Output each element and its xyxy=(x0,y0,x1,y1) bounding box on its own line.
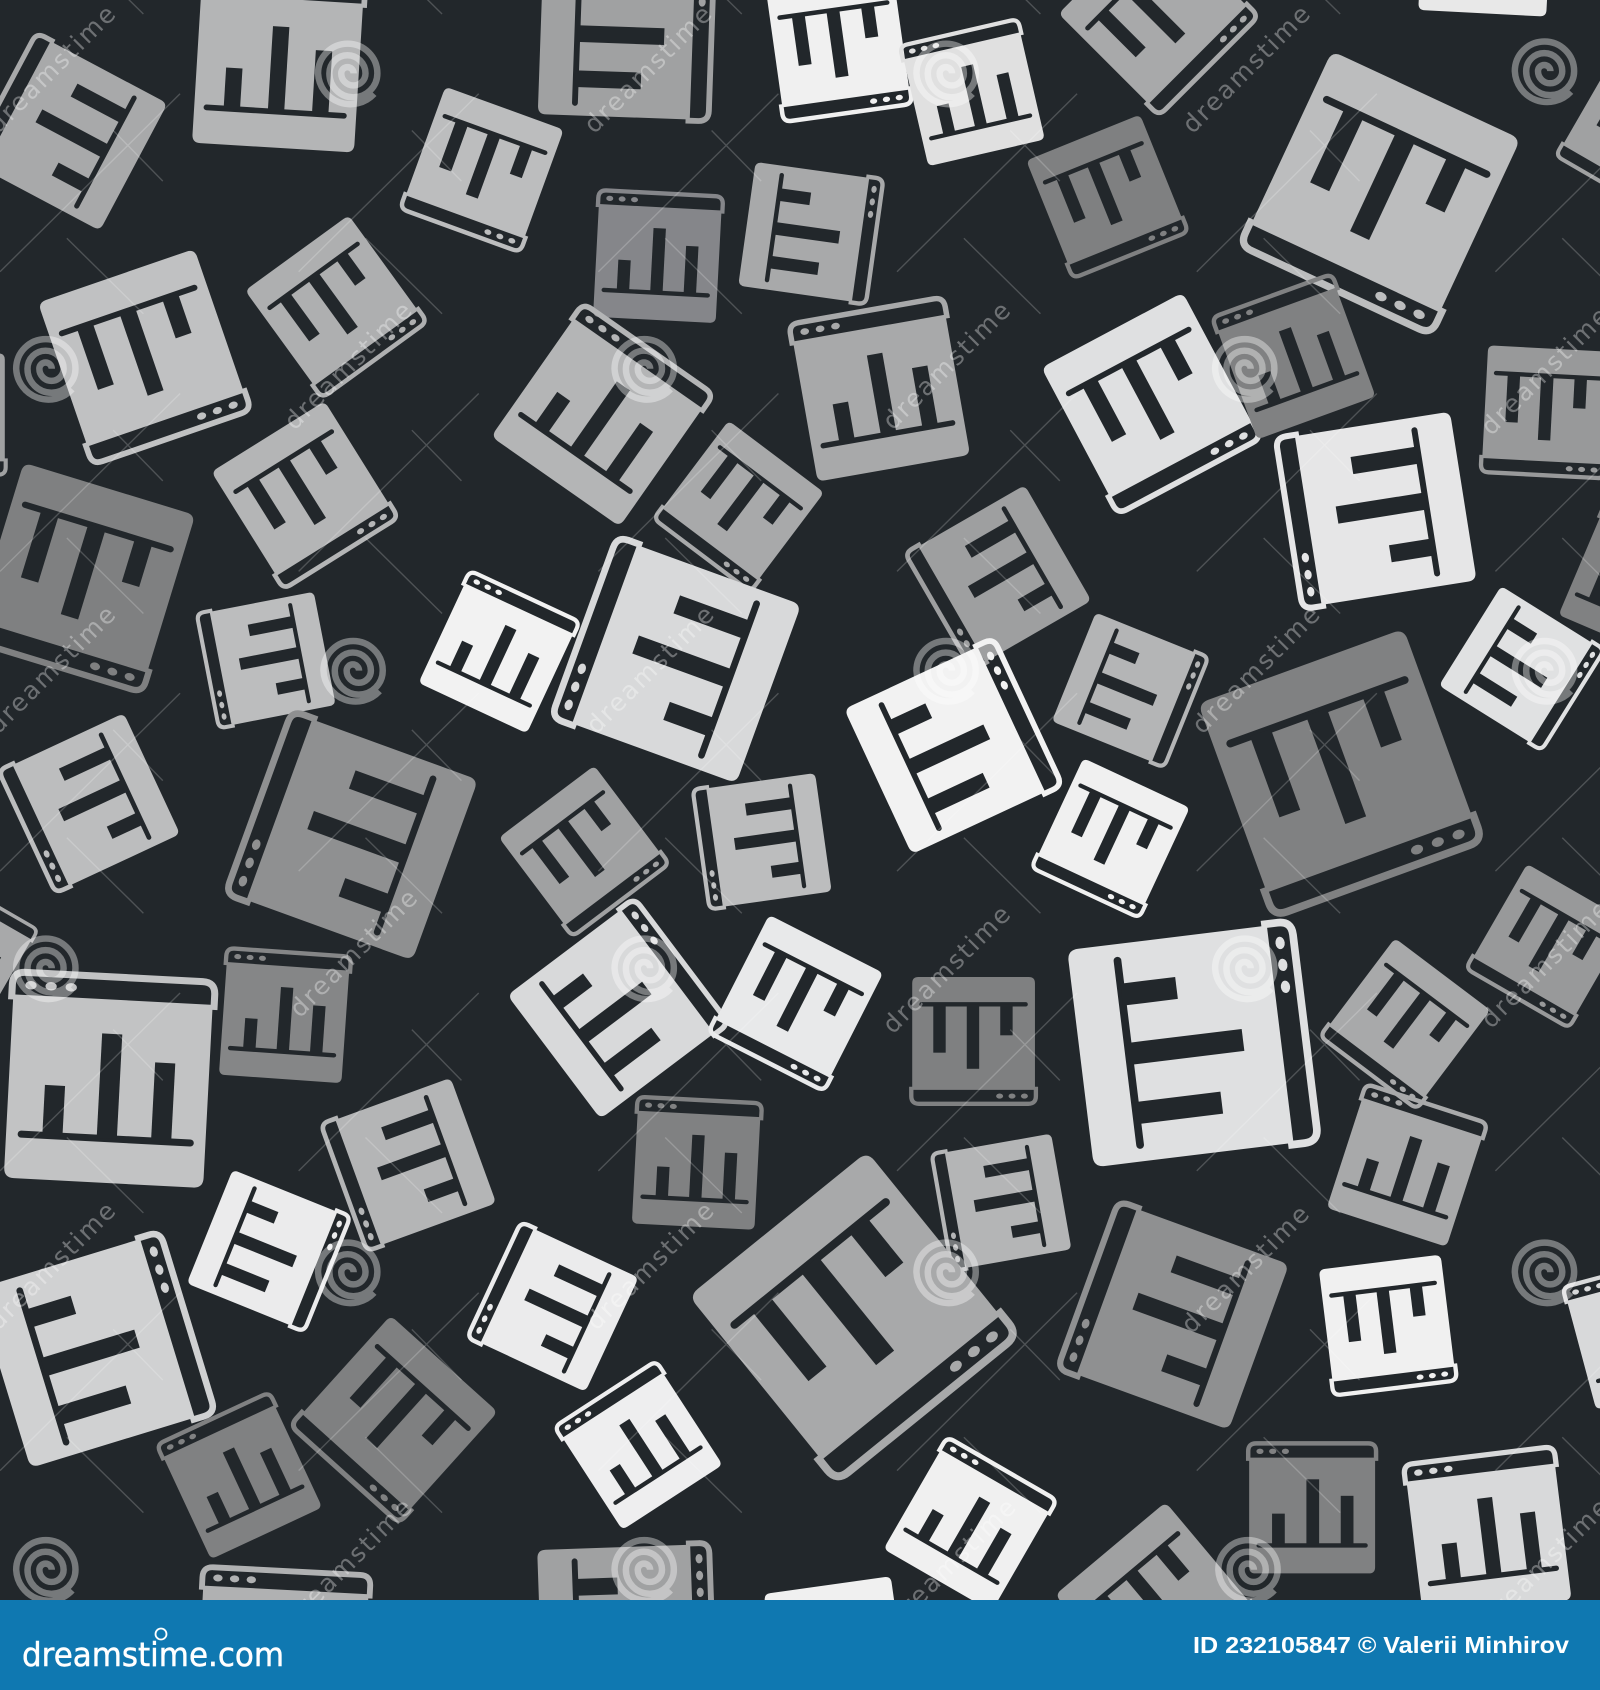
icon: chart window 56 xyxy=(1318,1255,1457,1396)
icon: chart window 29 xyxy=(0,712,181,893)
watermark overlay: lattice lines, spirals and diagonal wordmarks: dreamstime xyxy=(877,294,1018,435)
icon: chart window 32 xyxy=(1051,612,1209,768)
logo: dreamstime.com wordmark: dreamstime.com xyxy=(22,1635,284,1674)
icon: chart window 65 xyxy=(194,1567,371,1690)
icon: chart window 4 xyxy=(538,0,714,121)
icon: chart window 31 xyxy=(844,638,1062,855)
icon: chart window 64 xyxy=(537,1543,715,1690)
icon: chart window 59 xyxy=(554,1361,723,1530)
footer bar xyxy=(0,1600,1600,1690)
icon: chart window 40 xyxy=(708,914,884,1091)
icon: chart window 7 xyxy=(1058,0,1259,116)
watermark overlay: lattice lines, spirals and diagonal wordmarks: dreamstime xyxy=(278,294,419,435)
icon: chart window 38 xyxy=(1031,758,1191,918)
icon: chart window 46 xyxy=(1466,863,1600,1028)
watermark overlay: lattice lines, spirals and diagonal wordmarks: dreamstime xyxy=(578,0,719,139)
icon: chart window 47 xyxy=(321,1077,497,1251)
icon: chart window 30 xyxy=(225,711,479,962)
icon: chart window 58 xyxy=(157,1392,323,1560)
icon: chart window 37 xyxy=(693,772,832,910)
watermark overlay: lattice lines, spirals and diagonal wordmarks: dreamstime xyxy=(284,882,425,1023)
icon: chart window 44 xyxy=(911,977,1036,1104)
icon: chart window 36 xyxy=(498,765,669,937)
icon: chart window 26 xyxy=(418,571,580,734)
icon: chart window 10 xyxy=(1556,55,1600,212)
icon: chart window 35 xyxy=(1558,503,1600,661)
icon: chart window 55 xyxy=(1057,1201,1289,1431)
icon: chart window 49 xyxy=(186,1169,351,1332)
icon: chart window 67 xyxy=(1563,1255,1600,1410)
icon: chart window 57 xyxy=(290,1315,499,1523)
icon: chart window 12 xyxy=(592,190,723,323)
watermark overlay: lattice lines, spirals and diagonal wordmarks: dreamstime xyxy=(1176,0,1317,139)
icon: chart window 18 xyxy=(1040,292,1261,514)
icon: chart window 16 xyxy=(490,303,714,527)
icon: chart window 63 xyxy=(1054,1501,1262,1690)
icon: chart window 11 xyxy=(1417,0,1554,17)
icon: chart window 50 xyxy=(932,1133,1072,1271)
icon: chart window 8 xyxy=(1240,50,1522,334)
icon: chart window 17 xyxy=(789,297,971,482)
icon: chart window 68 xyxy=(0,878,38,1021)
icon: chart window 54 xyxy=(688,1151,1018,1481)
icon: chart window 61 xyxy=(1248,1443,1376,1573)
icon: chart window 1 xyxy=(0,33,168,232)
watermark overlay: lattice lines, spirals and diagonal wordmarks: dreamstime xyxy=(877,898,1018,1039)
icon: chart window 60 xyxy=(883,1437,1057,1612)
icon: chart window 48 xyxy=(631,1097,762,1230)
icon: chart window 2 xyxy=(191,0,365,153)
icon: chart window 21 xyxy=(211,401,398,589)
icon: chart window 66 xyxy=(763,1576,910,1690)
watermark overlay: lattice lines, spirals and diagonal wordmarks: dreamstime xyxy=(1186,598,1327,739)
icon: chart window 53 xyxy=(0,1231,215,1469)
icon: chart window 45 xyxy=(1320,938,1491,1109)
icon: chart window 25 xyxy=(905,484,1092,670)
icon: chart window 28 xyxy=(197,591,336,728)
icon: chart window 52 xyxy=(467,1222,639,1393)
icon: chart window 19 xyxy=(1212,274,1377,440)
icon: chart window 3 xyxy=(400,86,565,252)
icon: chart window 41 xyxy=(1067,921,1318,1169)
icon: chart window 5 xyxy=(765,0,912,122)
icon: chart window 6 xyxy=(900,19,1046,166)
icon: chart window 9 xyxy=(1025,114,1188,278)
icon: chart window 42 xyxy=(2,972,215,1188)
icon: chart window 33 xyxy=(1196,628,1483,916)
icon: chart window 15 xyxy=(244,215,427,398)
watermark overlay: lattice lines, spirals and diagonal wordmarks: dreamstime xyxy=(580,598,721,739)
icon: chart window 62 xyxy=(1403,1446,1573,1618)
watermark overlay: lattice lines, spirals and diagonal wordmarks: dreamstime xyxy=(580,1195,721,1336)
icon: chart window 43 xyxy=(218,948,351,1083)
icon: chart window 14 xyxy=(37,248,251,465)
icon: chart window 24 xyxy=(1275,410,1477,609)
icon: chart window 22 xyxy=(0,462,197,693)
image id and credit: ID 232105847 © Valerii Minhirov xyxy=(1193,1632,1569,1658)
icon: chart window 69 xyxy=(0,353,6,475)
icon: chart window 51 xyxy=(1326,1084,1488,1247)
icon: chart window 20 xyxy=(1481,345,1600,478)
icon: chart window 27 xyxy=(551,536,802,785)
icon: chart window 13 xyxy=(738,161,883,304)
icon: chart window 34 xyxy=(1438,585,1600,751)
icon: chart window 23 xyxy=(654,420,825,592)
watermark overlay: lattice lines, spirals and diagonal wordmarks: dreamstime xyxy=(1175,1198,1316,1339)
icon: chart window 39 xyxy=(507,898,729,1120)
